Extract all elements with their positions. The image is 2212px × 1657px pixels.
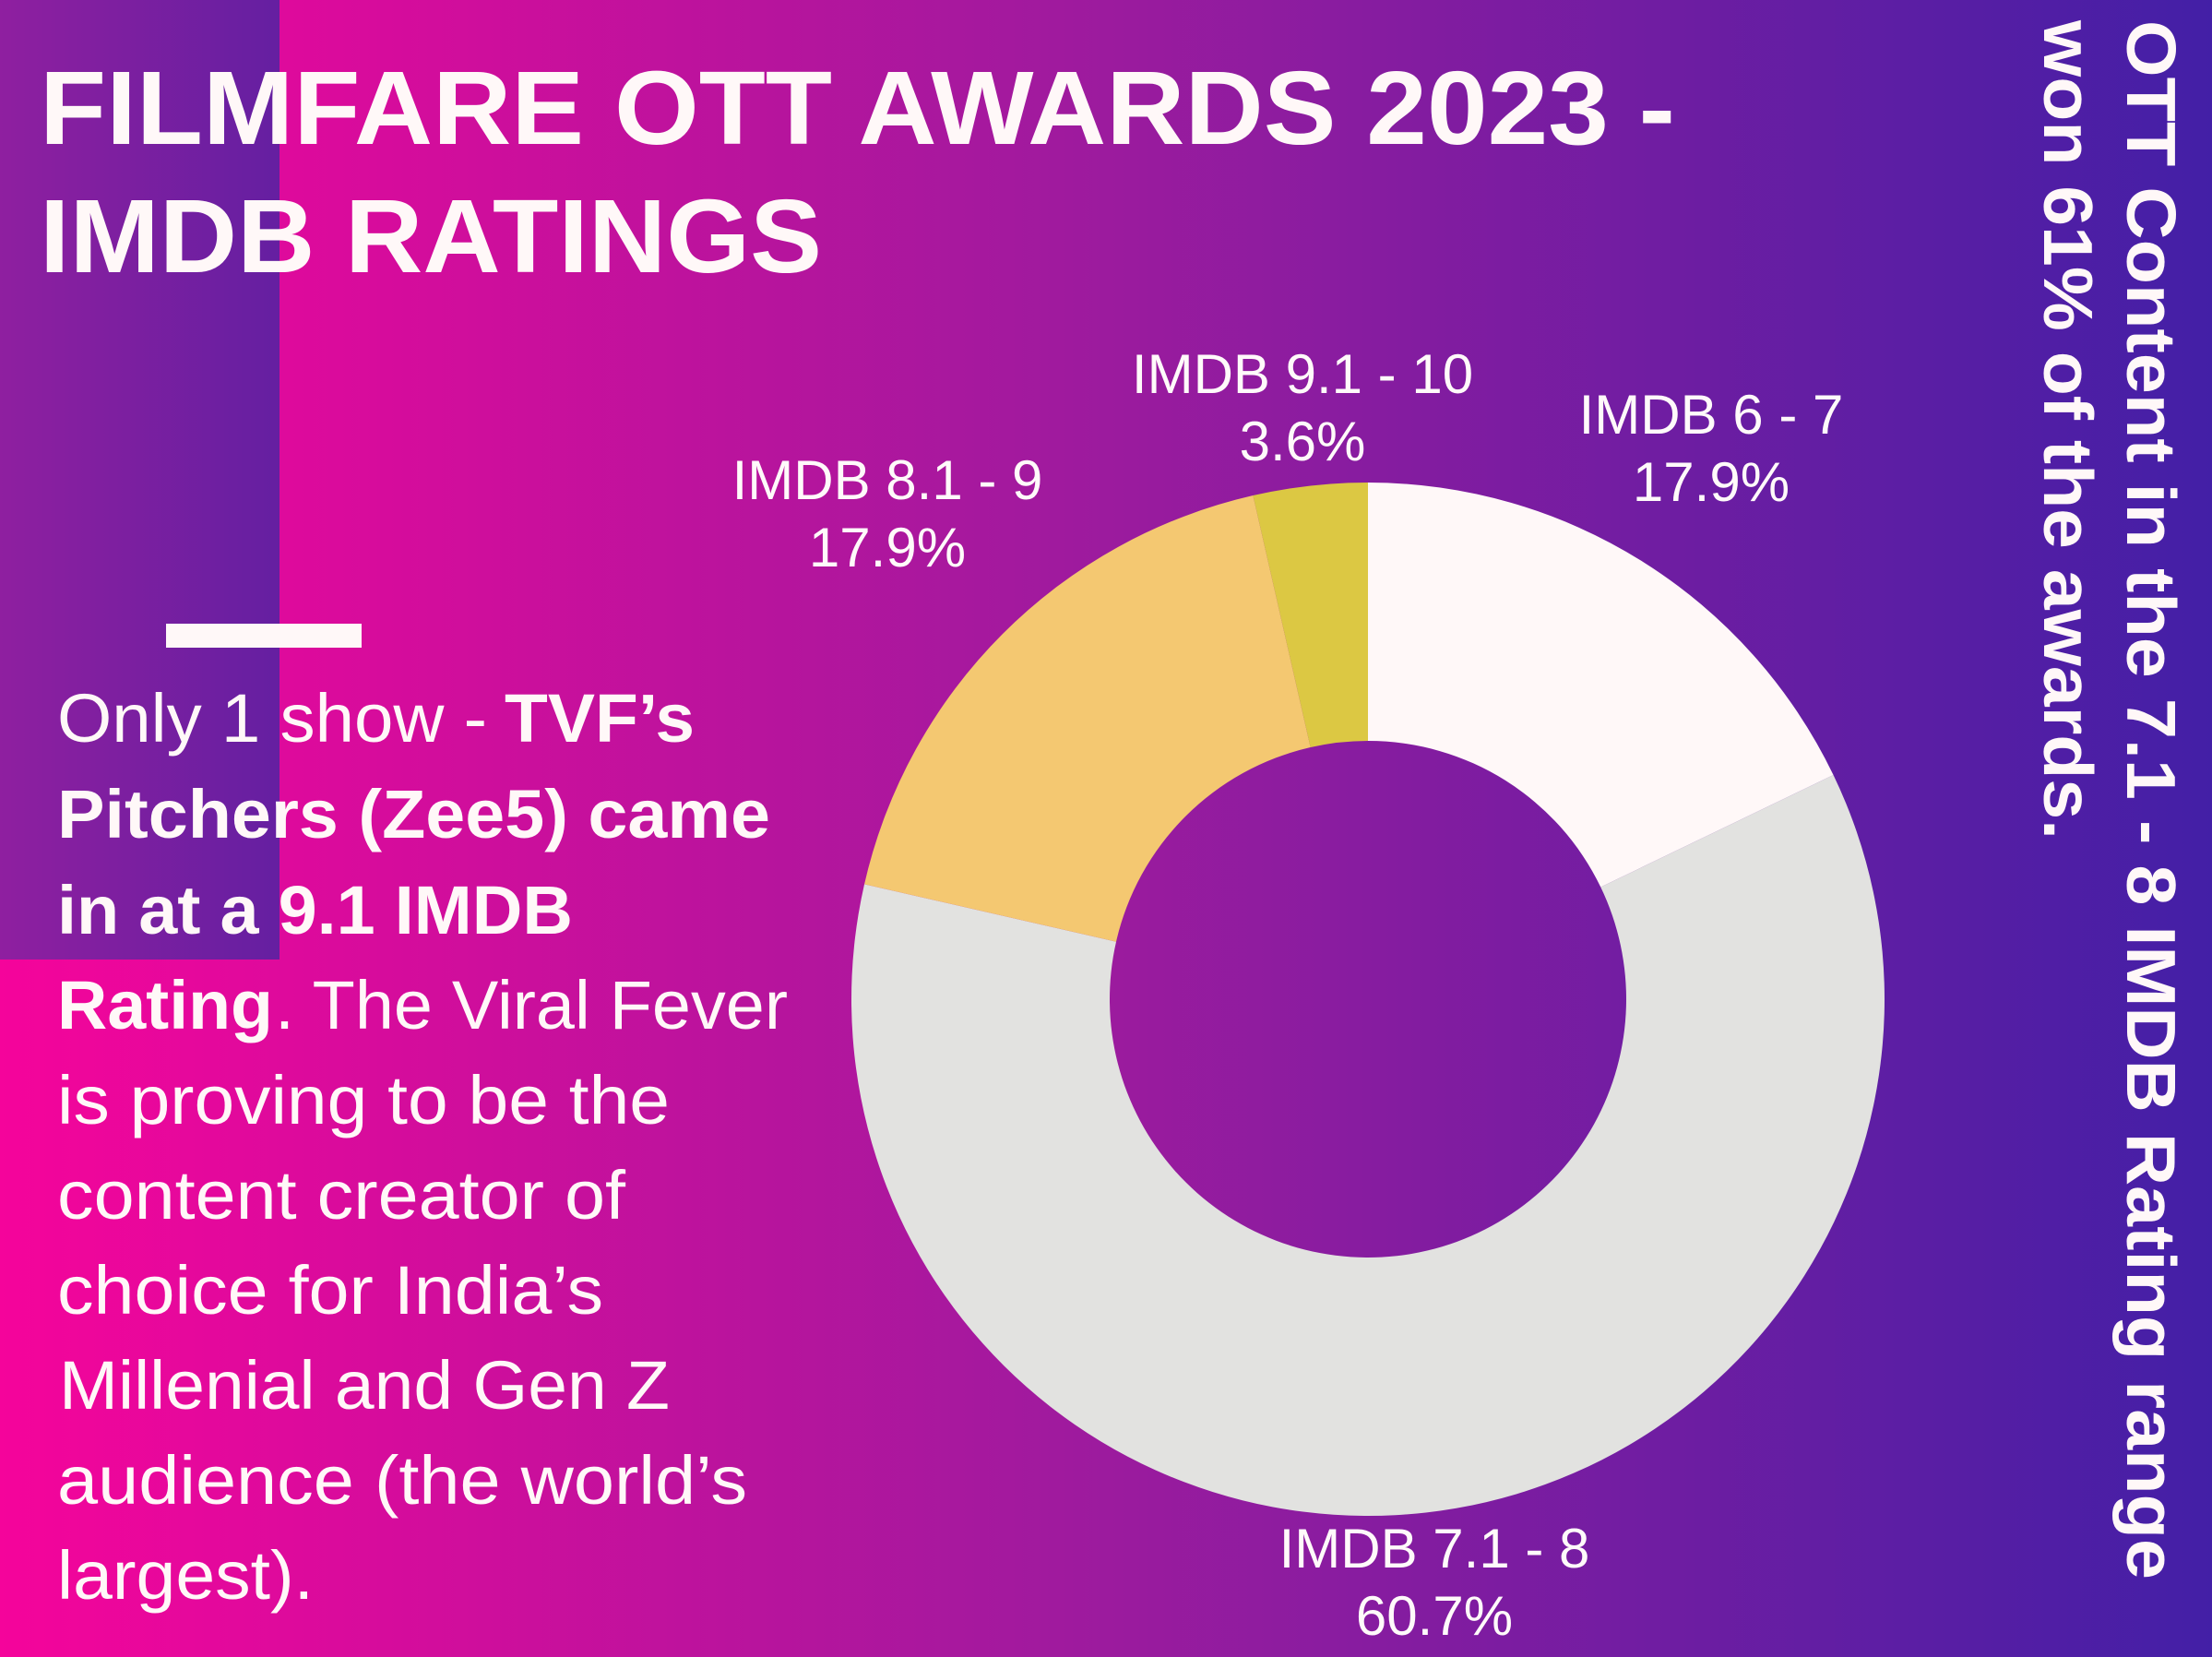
- text block: commentary: audience (the world’s: [57, 1442, 747, 1519]
- slice: IMDB 6 - 7: [1368, 483, 1834, 888]
- label: IMDB 8.1 - 9: 17.9%: [809, 517, 966, 578]
- title: IMDB RATINGS: [40, 178, 822, 294]
- label: IMDB 9.1 - 10: IMDB 9.1 - 10: [1132, 343, 1473, 405]
- text block: commentary: in at a 9.1 IMDB: [57, 872, 573, 948]
- text block: commentary: [57, 680, 788, 1614]
- label: IMDB 8.1 - 9: [732, 449, 1042, 578]
- rotated callout: [2029, 19, 2190, 1580]
- label: IMDB 7.1 - 8: 60.7%: [1356, 1585, 1513, 1647]
- label: IMDB 9.1 - 10: [1132, 343, 1473, 472]
- rotated callout: won 61% of the awards.: [2029, 19, 2107, 840]
- slice: IMDB 8.1 - 9: [864, 495, 1311, 942]
- text block: commentary: TVF’s: [505, 680, 695, 757]
- text block: commentary: Only 1 show -: [57, 680, 487, 757]
- title: [40, 50, 1675, 294]
- rotated callout: OTT Content in the 7.1 - 8 IMDB Rating range: [2112, 20, 2190, 1580]
- label: IMDB 9.1 - 10: 3.6%: [1240, 411, 1365, 472]
- text block: commentary: . The Viral Fever: [275, 967, 788, 1043]
- accent bar: [166, 624, 362, 648]
- text block: commentary: content creator of: [57, 1157, 625, 1234]
- donut chart: [851, 483, 1885, 1516]
- text block: commentary: choice for India’s: [57, 1252, 603, 1329]
- decorative purple panel: [0, 0, 279, 960]
- label: IMDB 7.1 - 8: IMDB 7.1 - 8: [1279, 1518, 1589, 1580]
- text block: commentary: largest).: [57, 1537, 314, 1614]
- label: IMDB 7.1 - 8: [1279, 1518, 1589, 1647]
- label: IMDB 6 - 7: [1579, 384, 1843, 513]
- slice: IMDB 7.1 - 8: [851, 775, 1885, 1516]
- slice: IMDB 9.1 - 10: [1253, 483, 1368, 747]
- text block: commentary: Rating: [57, 967, 273, 1043]
- text block: commentary: is proving to be the: [57, 1062, 670, 1138]
- label: IMDB 6 - 7: 17.9%: [1633, 451, 1790, 513]
- text block: commentary: Millenial and Gen Z: [59, 1347, 670, 1424]
- text block: commentary: Pitchers (Zee5) came: [57, 776, 770, 852]
- label: IMDB 6 - 7: IMDB 6 - 7: [1579, 384, 1843, 446]
- label: IMDB 8.1 - 9: IMDB 8.1 - 9: [732, 449, 1042, 511]
- title: FILMFARE OTT AWARDS 2023 -: [40, 50, 1675, 166]
